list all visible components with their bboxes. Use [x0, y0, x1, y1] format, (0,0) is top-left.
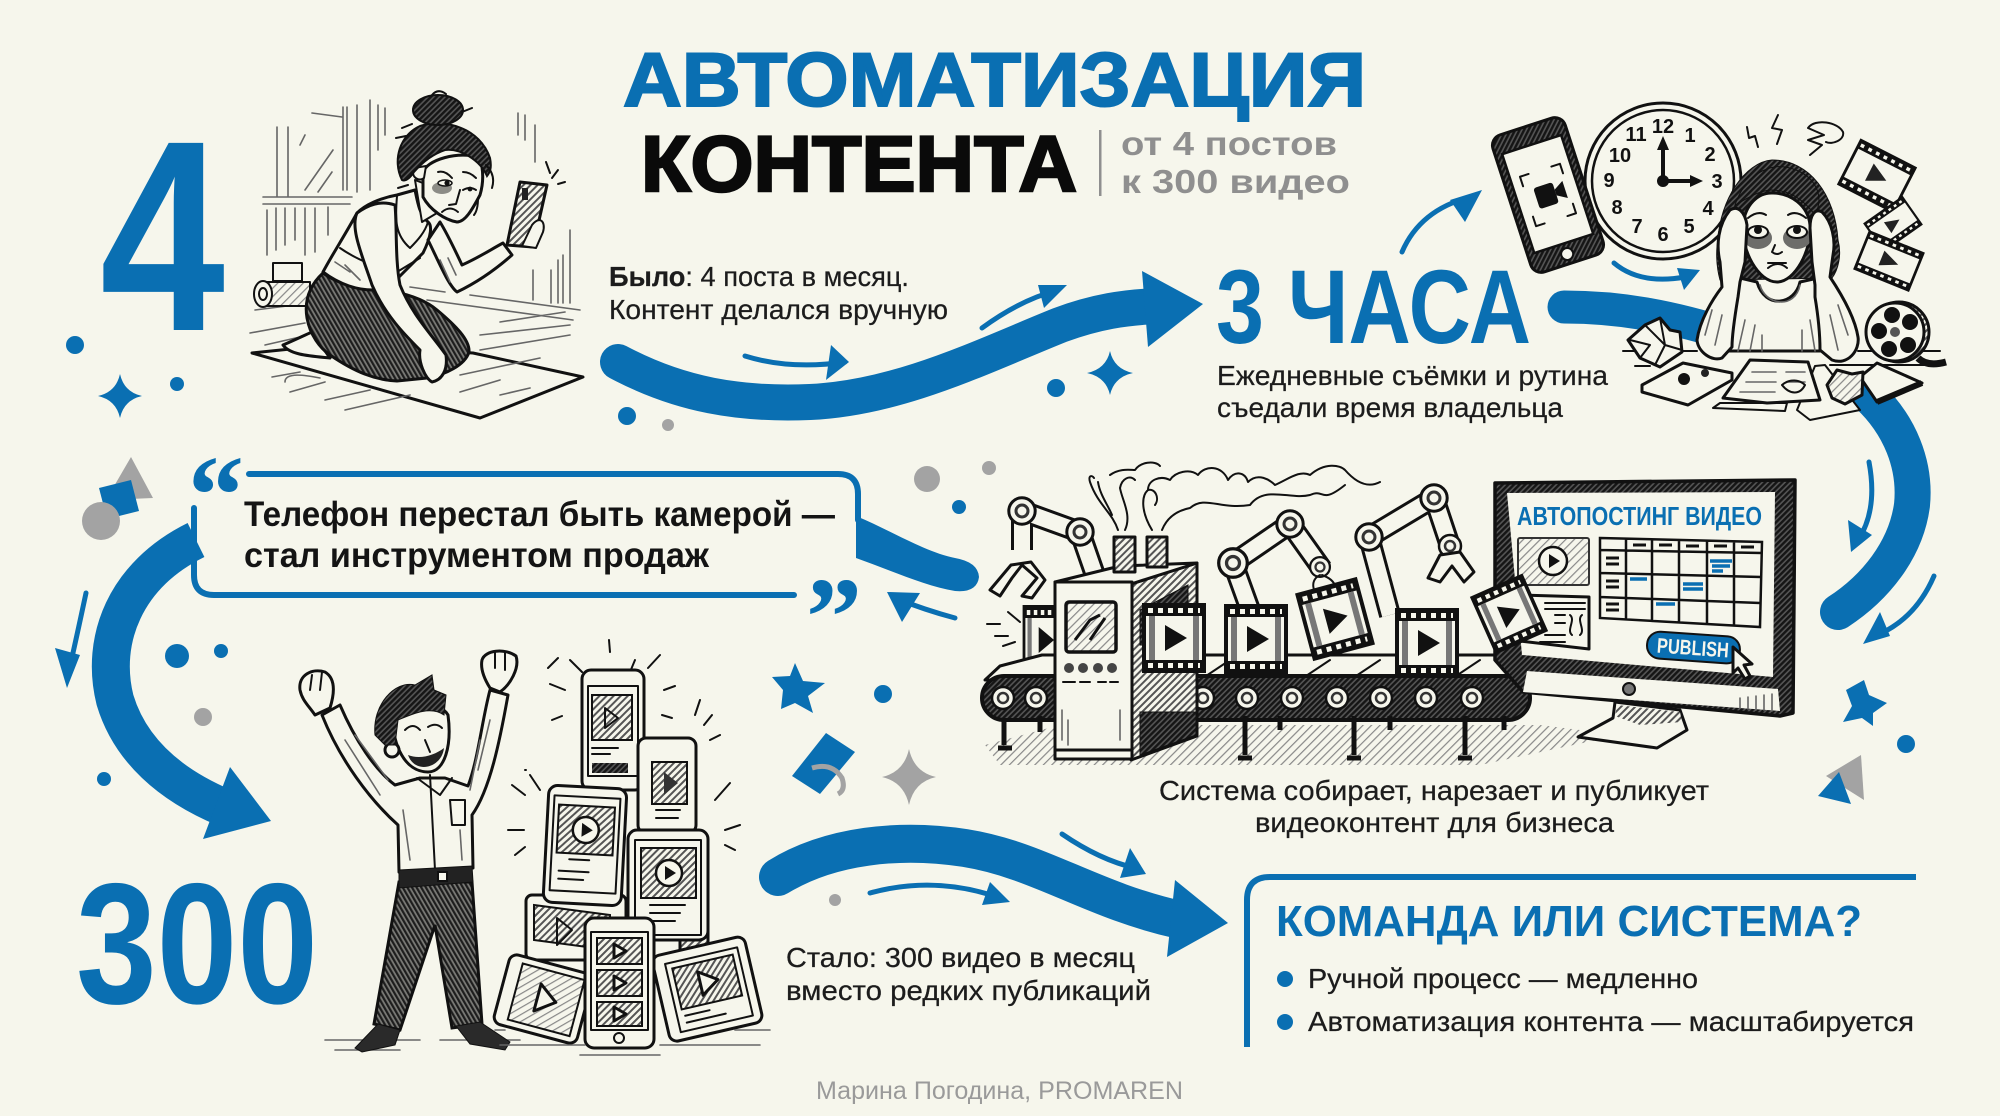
- clock: 2: [1704, 144, 1716, 166]
- eye bags: [1744, 226, 1811, 249]
- text: стало: вместо редких публикаций: [786, 975, 1151, 1006]
- quote text: [244, 495, 835, 575]
- film strip 1: [1839, 140, 1915, 212]
- clock: [1585, 103, 1741, 259]
- arm with phone: [428, 222, 512, 292]
- illustration: tired woman with phone: [250, 91, 583, 418]
- flow arrow: 3 hours to system: [1564, 307, 1913, 612]
- small arrow 4: [1614, 263, 1700, 290]
- text: было: Было: 4 поста в месяц.: [609, 261, 909, 292]
- legs: [374, 882, 482, 1030]
- text: ежедневные съёмки: [1217, 360, 1608, 423]
- crumpled paper 2: [1827, 370, 1863, 404]
- illustration: stack of devices: [492, 640, 770, 1055]
- arm down: [355, 203, 446, 382]
- ground shadow: [325, 1040, 520, 1050]
- text: система: Система собирает, нарезает и публикует: [1159, 775, 1709, 806]
- table line: [1623, 351, 1940, 366]
- film reel: [1866, 302, 1946, 364]
- subtitle: к 300 видео: [1121, 163, 1350, 200]
- publish button: [1646, 631, 1752, 679]
- text: система: видеоконтент для бизнеса: [1255, 807, 1614, 838]
- text: было: [609, 261, 948, 325]
- clock: 1: [1684, 125, 1696, 147]
- phone 2: [638, 738, 696, 833]
- hair back: [1717, 160, 1840, 280]
- middle arm: [1219, 511, 1336, 610]
- ear: [413, 166, 426, 180]
- yoga mat: [252, 345, 583, 418]
- small arrow 1: [745, 345, 849, 380]
- clock: 8: [1611, 197, 1623, 219]
- film strip 3: [1855, 232, 1923, 290]
- right arm and hand: [1810, 211, 1858, 361]
- smartphone: [1490, 115, 1606, 275]
- fists: [300, 651, 517, 715]
- big number 300: 300: [76, 848, 318, 1040]
- text: было: Контент делался вручную: [609, 294, 948, 325]
- clock: 11: [1625, 124, 1647, 146]
- shoes: [355, 1022, 510, 1052]
- small arrow 6: [1863, 576, 1934, 644]
- torso: [323, 190, 431, 290]
- left arm: [990, 498, 1096, 598]
- phone centre bottom: [585, 918, 654, 1048]
- neck: [415, 180, 437, 222]
- decorative dots: lower left: [97, 644, 228, 786]
- floor hatching: [985, 725, 1620, 765]
- subtitle: [1099, 125, 1350, 200]
- clock: 3: [1711, 171, 1723, 193]
- main paper: [1723, 360, 1820, 403]
- text: ежедневные съёмки: съедали время владельца: [1217, 392, 1563, 423]
- video card: [1518, 538, 1589, 585]
- clock: 9: [1603, 170, 1615, 192]
- tablet bottom left: [492, 953, 594, 1045]
- flow arrow: system to quote: [856, 516, 979, 591]
- hair bun: [413, 95, 463, 125]
- small arrow 3: [1402, 190, 1482, 252]
- tablet centre: [543, 785, 627, 906]
- clock: 4: [1702, 198, 1714, 220]
- machine: [1055, 537, 1197, 760]
- film frames on belt: [1144, 576, 1546, 676]
- motion lines: [987, 612, 1020, 646]
- clock: 7: [1631, 216, 1643, 238]
- small arrow 7: [887, 592, 955, 622]
- face: [393, 704, 449, 772]
- title line 2: КОНТЕНТА: [641, 119, 1077, 208]
- illustration: overwhelmed owner with clock and phone: [1490, 103, 1946, 420]
- decorative shapes: centre: [772, 663, 936, 906]
- tablet bottom right: [651, 936, 763, 1043]
- film strip 2: [1864, 197, 1922, 251]
- left arm and hand: [1697, 208, 1747, 359]
- small arrow 10: [870, 882, 1010, 905]
- hair: [375, 675, 446, 745]
- small arrow 5: [1848, 462, 1872, 552]
- panel heading: КОМАНДА ИЛИ СИСТЕМА?: [1276, 897, 1862, 946]
- crumpled paper: [1628, 318, 1682, 367]
- quote text: Телефон перестал быть камерой —: [244, 495, 835, 534]
- light rays: [508, 640, 740, 855]
- right arm: [1356, 485, 1474, 615]
- smoke: [1089, 463, 1380, 530]
- arms and shirt: [322, 690, 508, 872]
- subtitle: от 4 постов: [1121, 125, 1337, 162]
- belt: [399, 866, 473, 888]
- back landscape: [526, 895, 626, 960]
- title line 1: АВТОМАТИЗАЦИЯ: [623, 38, 1366, 123]
- big label 3 часа: 3 ЧАСА: [1216, 249, 1531, 366]
- stress lines: [1747, 115, 1843, 155]
- chimneys: [1114, 537, 1167, 572]
- phone motion lines: [546, 162, 565, 184]
- phone top: [582, 670, 644, 790]
- room background: [250, 100, 580, 350]
- text: ежедневные съёмки: Ежедневные съёмки и рутина: [1217, 360, 1608, 391]
- illustration: happy man: [300, 651, 520, 1052]
- stand: [1578, 702, 1687, 748]
- bullet 1: Ручной процесс — медленно: [1308, 963, 1698, 994]
- decorative shapes: left of quote: [82, 457, 996, 540]
- footer credit: Марина Погодина, PROMAREN: [816, 1077, 1183, 1105]
- left film: [1024, 607, 1066, 673]
- illustration: content factory conveyor: [982, 463, 1795, 765]
- torso: [1715, 278, 1845, 351]
- phone: [507, 182, 547, 247]
- monitor: [1495, 480, 1795, 748]
- flow arrow: 4 to 3 hours: [618, 271, 1203, 403]
- smile: [408, 748, 444, 767]
- document card: [1520, 595, 1589, 649]
- conveyor: [982, 655, 1530, 758]
- opening quote mark: “: [188, 434, 244, 558]
- face: [423, 155, 483, 222]
- quote text: стал инструментом продаж: [244, 536, 710, 575]
- ground lines: [495, 1030, 770, 1055]
- back right device: [680, 895, 708, 955]
- tablet right: [628, 830, 708, 940]
- text: стало: [786, 942, 1151, 1006]
- monitor heading: АВТОПОСТИНГ ВИДЕО: [1517, 501, 1762, 531]
- flow arrow: quote to 300: [111, 540, 271, 839]
- small arrow 8: [55, 593, 86, 688]
- clock: 10: [1609, 145, 1631, 167]
- title: [623, 38, 1366, 208]
- tablet: [1642, 363, 1732, 405]
- calendar: [1600, 538, 1762, 627]
- rolled mat and block: [254, 263, 310, 307]
- hair: [398, 123, 491, 181]
- small arrow 2: [982, 285, 1067, 328]
- bullet 2: Автоматизация контента — масштабируется: [1308, 1006, 1914, 1037]
- under papers: [1713, 365, 1860, 420]
- clock: 12: [1652, 116, 1674, 138]
- panel: команда или система: [1247, 877, 1916, 1047]
- clock: 6: [1657, 224, 1669, 246]
- clock: 5: [1683, 216, 1695, 238]
- flow arrow: 300 to question box: [778, 844, 1228, 957]
- face: [1743, 193, 1810, 282]
- closing quote mark: ”: [806, 556, 862, 680]
- small arrow 9: [1062, 834, 1146, 878]
- text: система: [1159, 775, 1709, 838]
- flat film: [1860, 363, 1922, 402]
- foot: [283, 332, 330, 358]
- quote box: [188, 434, 862, 680]
- decorative shapes: right: [1818, 680, 1915, 804]
- publish button: PUBLISH: [1656, 635, 1730, 662]
- ear: [385, 743, 399, 757]
- text: стало: Стало: 300 видео в месяц: [786, 942, 1135, 973]
- fringe: [1735, 167, 1819, 215]
- big number 4: 4: [100, 84, 226, 388]
- decorative dots and stars: upper left: [66, 336, 1133, 431]
- hand on phone: [522, 220, 544, 248]
- leggings: [306, 273, 469, 381]
